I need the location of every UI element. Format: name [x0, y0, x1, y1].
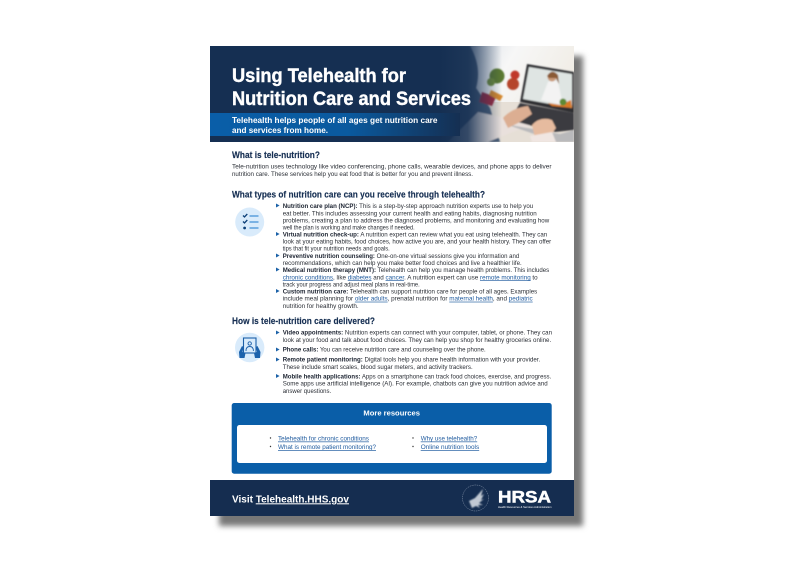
- links: Why use telehealth?: [421, 436, 477, 442]
- footer link: Visit Telehealth.HHS.gov: [232, 494, 349, 505]
- list: delivery methods: Mobile health applications: Apps on a smartphone can track food choices, exercise, and progress.: [283, 373, 551, 380]
- list: nutrition care types: [282, 203, 552, 310]
- title: Nutrition Care and Services: [232, 88, 471, 110]
- bullet markers: [276, 204, 280, 293]
- list: nutrition care types: chronic conditions, like diabetes and cancer. A nutrition expert can use remote monitoring to: [283, 274, 538, 281]
- list: delivery methods: Remote patient monitoring: Digital tools help you share health information with your provider.: [283, 357, 540, 364]
- heading: what is tele-nutrition: What is tele-nutrition?: [232, 150, 320, 161]
- list: delivery methods: look at your food and talk about food choices. They can help you shop for healthy groceries online.: [283, 337, 551, 344]
- section: types of nutrition care: [232, 190, 552, 310]
- subtitle band: [210, 113, 460, 136]
- list: nutrition care types: include meal planning for older adults, prenatal nutrition for maternal health, and pediatric: [283, 296, 533, 303]
- list: nutrition care types: look at your eating habits, food choices, how active you are, and your health history. They can offer: [283, 239, 552, 246]
- links: [278, 436, 480, 451]
- intro text: nutrition care. These services help you eat food that is better for you and prevent illness.: [232, 171, 473, 178]
- list: delivery methods: answer questions.: [283, 388, 331, 395]
- intro text: Tele-nutrition uses technology like video conferencing, phone calls, wearable devices, and phone apps to deliver: [232, 164, 552, 170]
- links: What is remote patient monitoring?: [278, 444, 376, 451]
- list: nutrition care types: Nutrition care plan (NCP): This is a step-by-step approach nutrition experts use to help you: [283, 203, 534, 210]
- bullet markers: [276, 330, 280, 378]
- list: delivery methods: Video appointments: Nutrition experts can connect with your computer, tablet, or phone. They can: [283, 330, 552, 337]
- section: how care is delivered: [232, 316, 552, 395]
- page panel: [210, 46, 574, 516]
- logo: HRSA wordmark: Health Resources & Services Administration: [498, 505, 552, 509]
- list: nutrition care types: Medical nutrition therapy (MNT): Telehealth can help you manage health problems. This includes: [283, 267, 550, 274]
- list: nutrition care types: tips that fit your nutrition needs and goals.: [283, 246, 390, 253]
- icon: checklist: [235, 208, 264, 236]
- header photo: telehealth laptop and vegetables: [440, 46, 574, 142]
- list: nutrition care types: Virtual nutrition check-up: A nutrition expert can review what you eat using telehealth. They can: [283, 232, 548, 239]
- list: nutrition care types: problems, creating a plan to address the diagnosed problems, and monitoring and evaluating how: [283, 218, 549, 225]
- list: delivery methods: These include smart scales, blood sugar meters, and activity trackers.: [283, 364, 473, 371]
- panel: more resources: [232, 403, 552, 474]
- subtitle: and services from home.: [232, 125, 328, 135]
- footer: [210, 480, 574, 516]
- logo: HHS seal: [462, 485, 488, 511]
- title: [232, 65, 471, 110]
- list: delivery methods: [283, 330, 552, 395]
- section: what is tele-nutrition: [232, 150, 552, 178]
- list: nutrition care types: track your progress and adjust meal plans in real-time.: [283, 282, 420, 289]
- subtitle: [232, 115, 438, 135]
- heading: how is care delivered: How is tele-nutrition care delivered?: [232, 316, 375, 327]
- list: nutrition care types: nutrition for healthy growth.: [283, 303, 359, 310]
- heading: types of care: What types of nutrition care can you receive through telehealth?: [232, 190, 485, 200]
- list: nutrition care types: well the plan is working and make changes if needed.: [282, 225, 415, 232]
- page shadow: [219, 56, 583, 526]
- links: Telehealth for chronic conditions: [278, 436, 370, 442]
- list: nutrition care types: Preventive nutrition counseling: One-on-one virtual sessions give you information and: [283, 253, 520, 260]
- list: nutrition care types: Custom nutrition care: Telehealth can support nutrition care for people of all ages. Examples: [283, 289, 538, 296]
- title: Using Telehealth for: [232, 65, 406, 87]
- list: nutrition care types: eat better. This includes assessing your current health and eating habits, diagnosing nutrition: [283, 210, 537, 217]
- link bullets: [270, 437, 414, 447]
- logo: HRSA wordmark: HRSA: [498, 489, 551, 507]
- list: delivery methods: Phone calls: You can receive nutrition care and counseling over the phone.: [283, 347, 486, 354]
- resource links card: [237, 425, 547, 463]
- links: Online nutrition tools: [421, 444, 480, 451]
- heading: more resources: More resources: [363, 408, 420, 417]
- list: nutrition care types: recommendations, which can help you make better food choices and live a healthier life.: [283, 260, 522, 267]
- subtitle: Telehealth helps people of all ages get nutrition care: [232, 115, 438, 125]
- icon: hands holding tablet: [235, 333, 264, 362]
- list: delivery methods: Some apps use artificial intelligence (AI). For example, chatbots can give you nutrition advice and: [283, 381, 548, 388]
- header banner: [210, 46, 574, 142]
- intro text: [232, 164, 552, 178]
